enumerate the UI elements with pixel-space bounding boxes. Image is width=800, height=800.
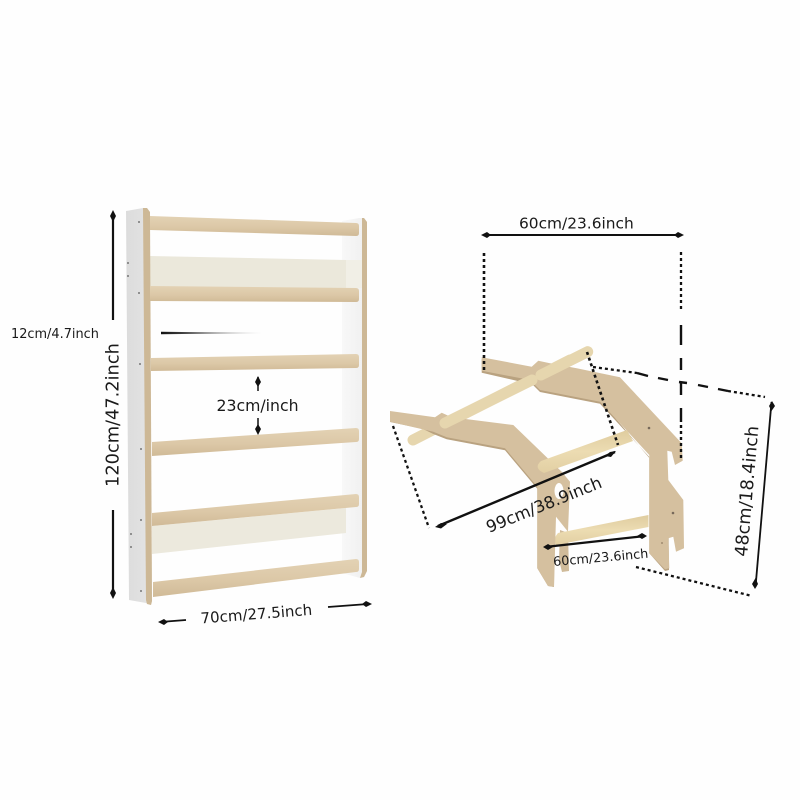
dimension: 60cm lower width: 60cm/23.6inch — [553, 547, 649, 570]
rung 4 — [152, 428, 359, 456]
dimension: 99cm depth: 99cm/38.9inch — [483, 473, 605, 537]
dimension: 12cm depth: 12cm/4.7inch — [11, 327, 99, 342]
dimension: 70cm width: 70cm/27.5inch — [200, 601, 313, 627]
front bracket — [390, 411, 570, 587]
dimension: 70cm width — [158, 601, 372, 627]
back bracket — [482, 357, 684, 571]
wall ladder product — [126, 208, 367, 605]
rear top rod middle section — [445, 380, 532, 423]
dimension: 48cm height — [593, 367, 775, 596]
dimension: 23cm spacing: 23cm/inch — [216, 396, 299, 415]
rear top rod lower section — [413, 360, 570, 440]
rear top rod upper section — [541, 352, 588, 375]
right side panel — [342, 218, 367, 578]
rear leg of front bracket — [559, 530, 569, 572]
rung 3 — [151, 354, 359, 371]
upper white shelf board — [150, 256, 362, 288]
lower white shelf board — [152, 508, 346, 554]
pull-up bar product — [390, 352, 684, 587]
rung 2 — [150, 286, 359, 302]
rung 6 — [153, 559, 359, 597]
rung 5 — [152, 494, 359, 526]
left side panel — [126, 208, 152, 605]
dimension: 60cm top width — [481, 214, 684, 459]
lower rod — [554, 515, 648, 545]
rung 1 — [150, 216, 359, 236]
dimension: 48cm height: 48cm/18.4inch — [732, 425, 763, 557]
dimension: 99cm depth — [393, 352, 618, 537]
dimension: 60cm top width: 60cm/23.6inch — [519, 214, 634, 232]
middle rod — [538, 430, 633, 473]
dimension: 23cm spacing — [216, 376, 299, 435]
dimension: 120cm height — [102, 210, 124, 599]
dimension: 120cm height: 120cm/47.2inch — [102, 343, 124, 487]
dimension: 60cm lower width — [543, 533, 649, 570]
